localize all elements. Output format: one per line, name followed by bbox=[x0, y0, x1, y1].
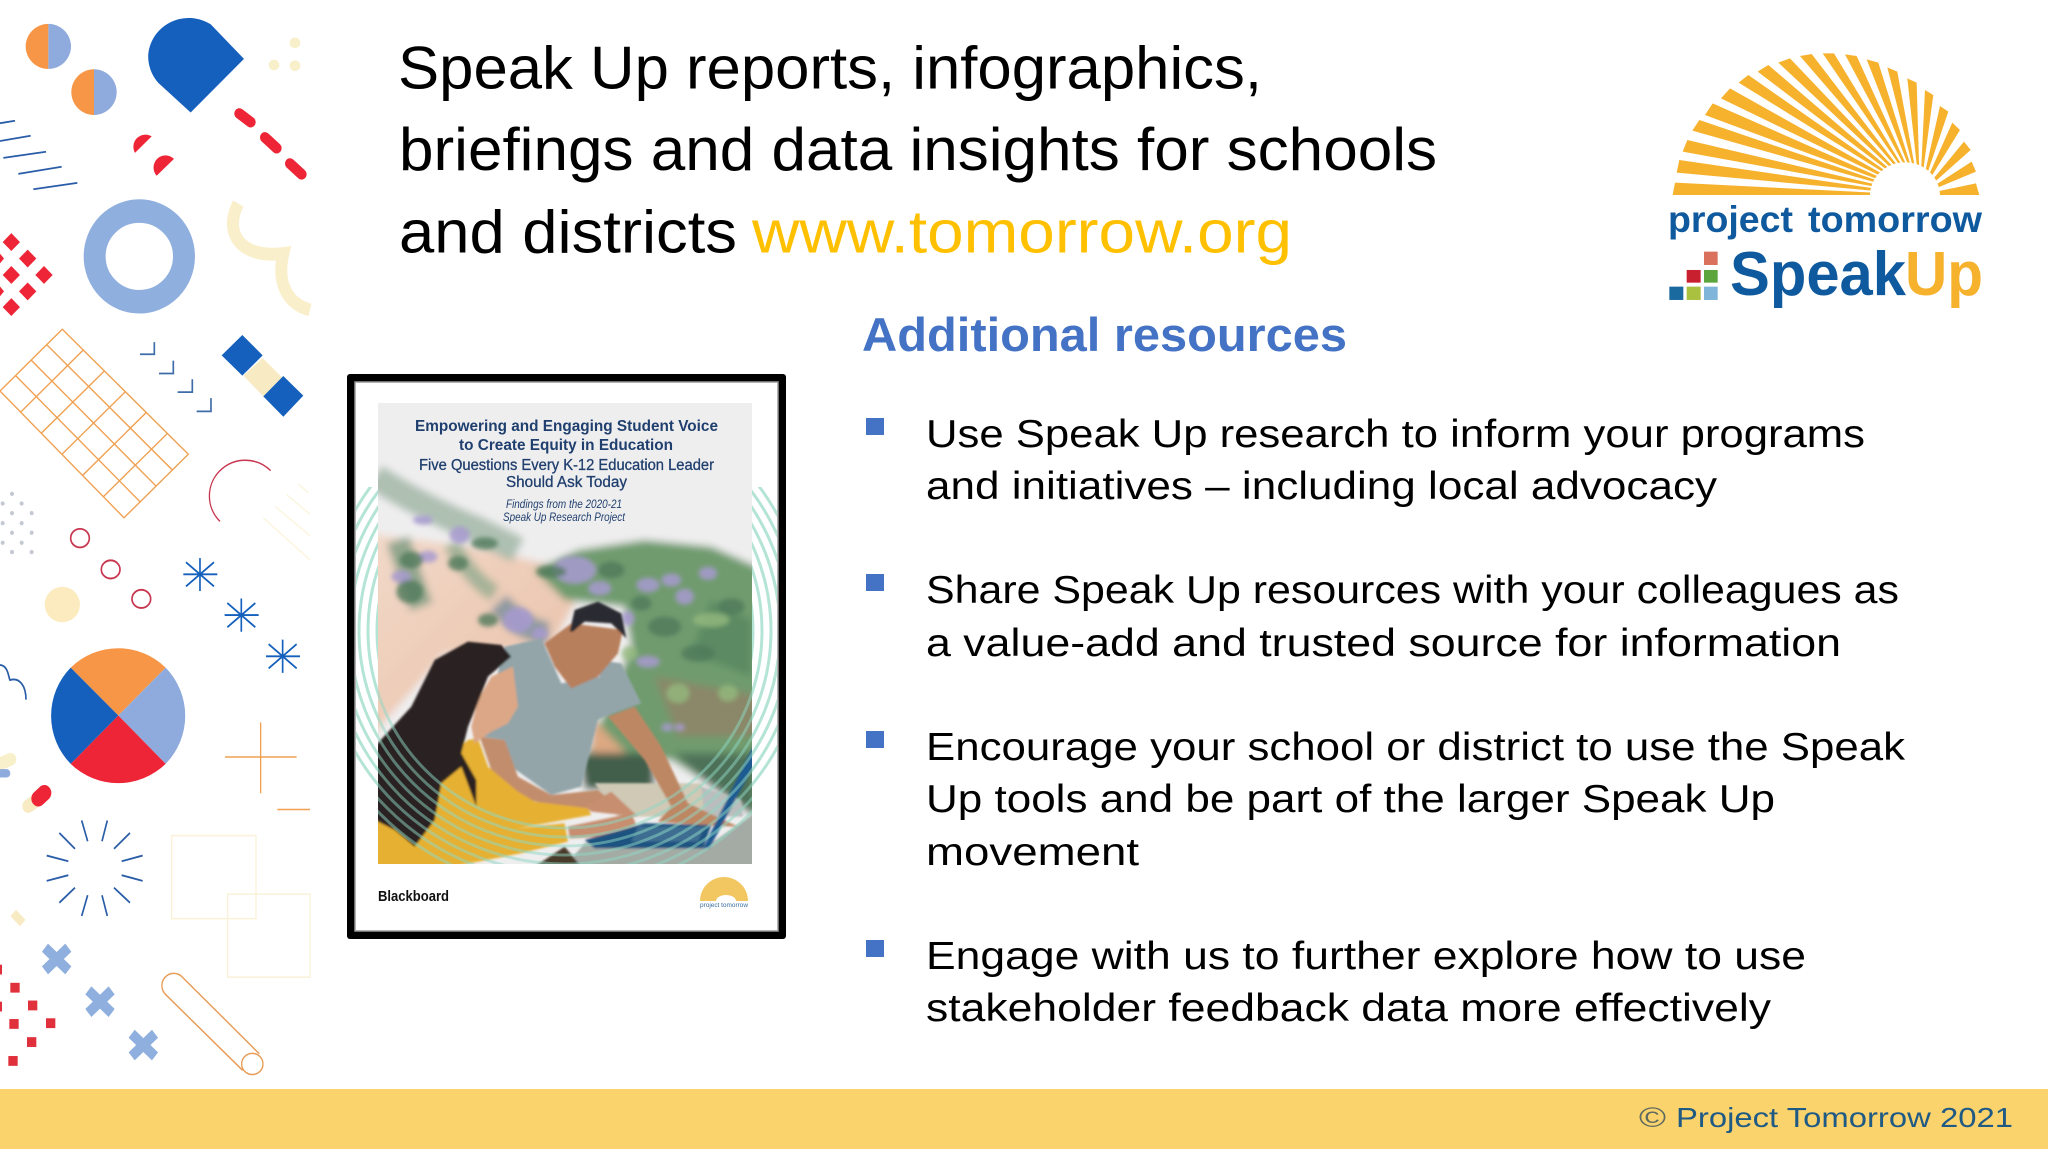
cover Blackboard logo: Blackboard bbox=[378, 889, 449, 905]
title: briefings and data insights for schools bbox=[399, 116, 1437, 183]
bullet 1 bbox=[866, 413, 1865, 508]
icon: four colour pie bbox=[51, 648, 185, 783]
bullet list bbox=[866, 413, 1906, 1030]
cover lower ring overlay bbox=[378, 690, 752, 864]
icon: starburst bbox=[47, 820, 143, 916]
icon: red half discs bbox=[133, 135, 174, 176]
icon: red arc bbox=[209, 460, 271, 521]
title: Speak Up reports, infographics, bbox=[398, 34, 1262, 102]
icon: red rings bbox=[101, 560, 151, 608]
bullet 1: Use Speak Up research to inform your programs bbox=[926, 413, 1865, 456]
logo wordmark: SpeakUp: Up bbox=[1905, 240, 1983, 309]
icon: coloured squares bbox=[1669, 252, 1718, 300]
foliage texture bbox=[391, 515, 745, 731]
title bbox=[398, 34, 1437, 266]
icon: orange capsule bbox=[162, 973, 263, 1075]
decorative shapes: lower left bbox=[0, 558, 310, 1075]
cover text: Five Questions Every K-12 Education Leader bbox=[419, 457, 714, 474]
icon: chevrons bbox=[140, 342, 211, 411]
bullet 1: and initiatives – including local advocacy bbox=[926, 465, 1718, 508]
copyright text: Project Tomorrow 2021 bbox=[1676, 1102, 2013, 1133]
cover project tomorrow logo: project tomorrow bbox=[700, 902, 748, 909]
icon: pale stripes bbox=[263, 484, 310, 560]
icon: half circles bbox=[26, 24, 117, 115]
bullet 3: movement bbox=[926, 831, 1139, 874]
bullet 2: Share Speak Up resources with your colleagues as bbox=[926, 569, 1899, 612]
cover text: to Create Equity in Education bbox=[459, 437, 673, 454]
icon: pills bbox=[0, 759, 44, 923]
bullet 4: Engage with us to further explore how to use bbox=[926, 935, 1806, 978]
icon: red diamonds bbox=[0, 233, 53, 316]
people and laptop bbox=[375, 602, 755, 867]
icon: blue cloud line bbox=[0, 665, 26, 700]
icon: blue lines bbox=[0, 121, 77, 189]
icon: red squares bbox=[0, 965, 55, 1066]
icon: small red ring bbox=[71, 529, 89, 547]
copyright text: © bbox=[1639, 1102, 1666, 1133]
icon: blue crosses bbox=[45, 948, 155, 1056]
decorative shapes: upper left bbox=[0, 18, 310, 560]
title: www.tomorrow.org bbox=[751, 198, 1292, 266]
report cover bbox=[347, 374, 786, 939]
cover frame bbox=[347, 374, 786, 939]
logo wordmark: tomorrow: tomorrow bbox=[1808, 199, 1982, 240]
cover text: Empowering and Engaging Student Voice bbox=[415, 418, 718, 435]
icon: pale dots bbox=[269, 37, 300, 71]
title: and districts bbox=[399, 198, 737, 266]
cover text: Speak Up Research Project bbox=[503, 512, 626, 524]
bullet 3 bbox=[866, 726, 1906, 874]
cover text bbox=[415, 418, 718, 524]
icon: sun rays bbox=[1673, 53, 1979, 229]
bullet 4: stakeholder feedback data more effectively bbox=[926, 987, 1772, 1030]
cover text: Findings from the 2020-21 bbox=[506, 499, 622, 511]
icon: orange grid bbox=[0, 329, 188, 518]
icon: blue and cream diamonds bbox=[222, 335, 303, 417]
heading: additional resources: Additional resources bbox=[862, 308, 1347, 361]
icon: red dashes bbox=[239, 114, 302, 174]
bullet 2: a value-add and trusted source for information bbox=[926, 622, 1841, 665]
logo wordmark: SpeakUp: Speak bbox=[1730, 240, 1906, 309]
footer bar bbox=[0, 1089, 2048, 1149]
icon: blue asterisks bbox=[183, 558, 300, 673]
cover green rings bbox=[356, 487, 777, 787]
logo wordmark: project: project bbox=[1668, 199, 1793, 240]
icon: orange plus and minus bbox=[225, 722, 310, 810]
bullet 4 bbox=[866, 935, 1806, 1030]
icon: blue ring bbox=[95, 211, 184, 302]
logo: project tomorrow speak up bbox=[1668, 53, 1983, 309]
icon: pale curve bbox=[233, 204, 310, 310]
icon: blue teardrop bbox=[148, 18, 244, 112]
cover text: Should Ask Today bbox=[506, 474, 627, 491]
icon: pale disc bbox=[45, 587, 80, 622]
cover project tomorrow logo bbox=[700, 877, 748, 909]
bullet 3: Encourage your school or district to use the Speak bbox=[926, 726, 1906, 769]
bullet 3: Up tools and be part of the larger Speak Up bbox=[926, 778, 1775, 821]
bullet 2 bbox=[866, 569, 1899, 665]
icon: gray dots bbox=[1, 492, 34, 554]
icon: pale squares bbox=[172, 836, 310, 977]
cover photo bbox=[368, 393, 765, 873]
